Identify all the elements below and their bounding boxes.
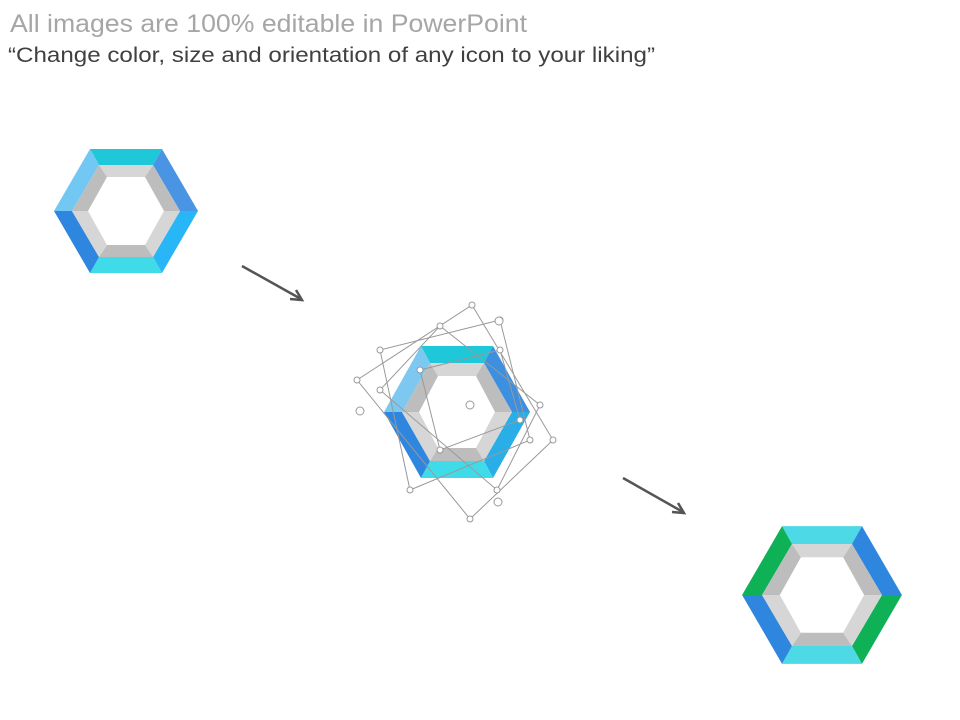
arrow 1	[242, 266, 302, 300]
icon: hexagon ring 1	[54, 149, 198, 273]
arrow 2	[623, 478, 684, 513]
title: All images are 100% editable in PowerPoint	[10, 10, 527, 38]
subtitle: “Change color, size and orientation of any icon to your liking”	[8, 44, 655, 67]
icon: hexagon ring 3	[742, 526, 902, 664]
icon: hexagon ring 2 with selection wireframe	[354, 302, 556, 522]
